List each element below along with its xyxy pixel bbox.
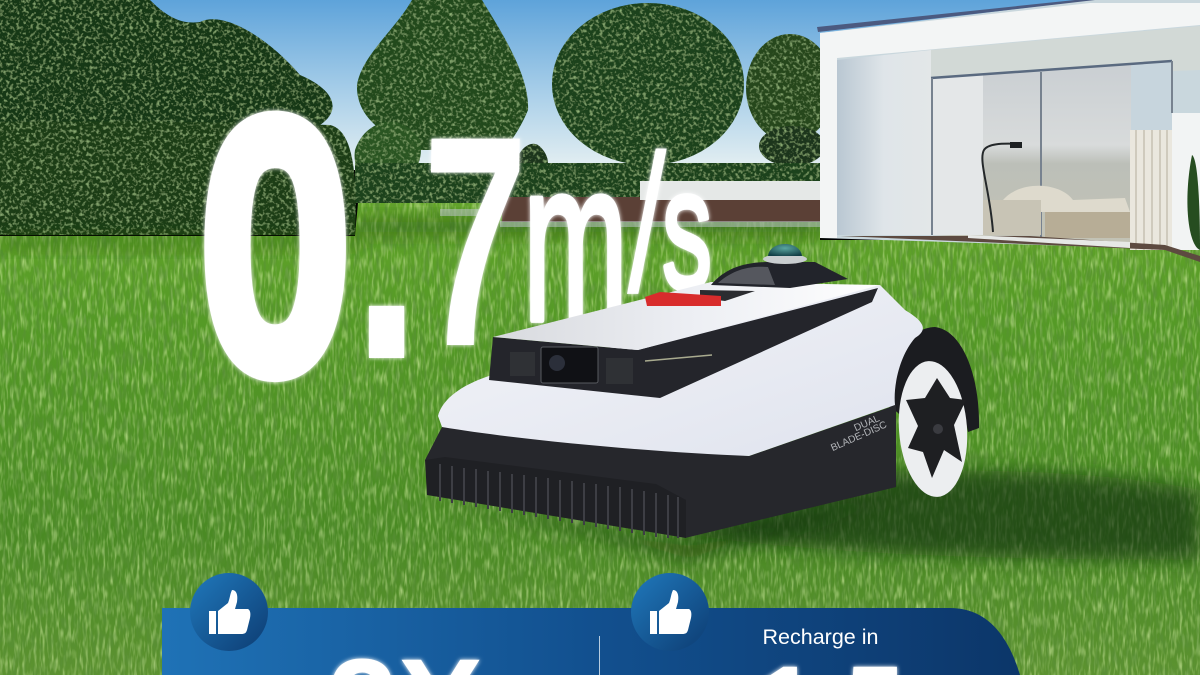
display and stop button <box>700 290 755 301</box>
divider <box>599 636 600 675</box>
0.7 m/s speed headline: / <box>627 113 667 334</box>
icon: thumbs up left <box>190 573 268 651</box>
stat: recharge time <box>764 628 900 675</box>
camera <box>541 347 598 383</box>
hedges <box>0 121 820 235</box>
model label: DUAL <box>853 413 882 434</box>
top plate <box>493 282 880 350</box>
robotic mower <box>425 244 979 538</box>
bumper <box>425 457 686 538</box>
stat: recharge time: Recharge in <box>763 625 878 649</box>
bottom stats panel <box>162 573 1020 675</box>
lidar housing <box>711 262 848 288</box>
house <box>817 0 1200 262</box>
icon: thumbs up right <box>631 573 709 651</box>
sliding glass door <box>931 61 1172 250</box>
0.7 m/s speed headline: . <box>352 43 421 433</box>
trees <box>0 0 834 186</box>
sensor dome <box>768 244 802 256</box>
0.7 m/s speed headline: 7 <box>419 74 529 410</box>
robotic mower: BLADE-DISC <box>829 419 889 454</box>
0.7 m/s speed headline: m <box>523 113 628 370</box>
black front face <box>489 288 878 398</box>
0.7 m/s speed headline <box>207 43 712 434</box>
rear wheel fender <box>886 327 979 432</box>
garden bench and deck <box>440 181 820 227</box>
mower shadow <box>660 470 1200 560</box>
sky <box>0 0 1200 170</box>
white shell <box>438 285 923 456</box>
lawn <box>0 200 1200 675</box>
chassis <box>425 405 896 538</box>
wheel <box>894 359 972 499</box>
0.7 m/s speed headline: 0 <box>207 59 343 434</box>
0.7 m/s speed headline: s <box>662 133 712 325</box>
